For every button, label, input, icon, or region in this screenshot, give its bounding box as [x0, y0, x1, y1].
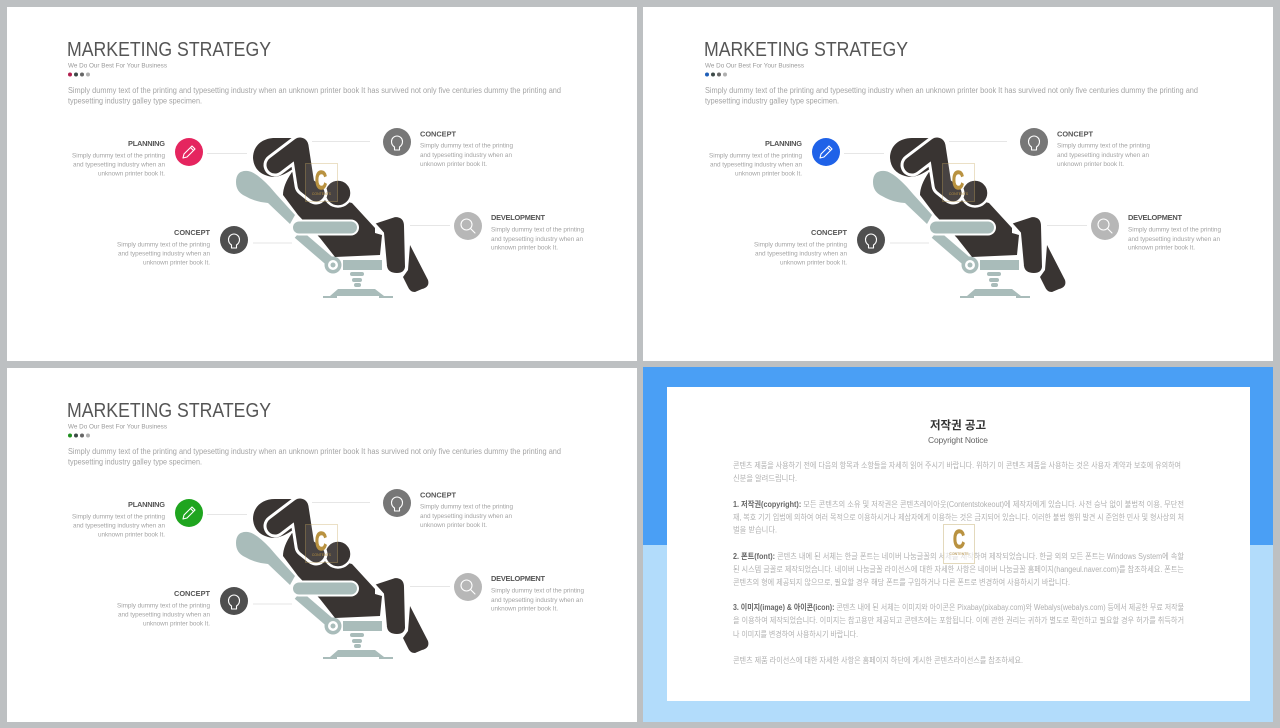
text: section 3 image and icon — [733, 602, 1184, 639]
watermark logo: C — [953, 524, 965, 554]
callout: concept top: unknown printer book It. — [420, 522, 487, 529]
figure: reclining person in chair — [873, 138, 1065, 298]
title: MARKETING STRATEGY — [704, 38, 908, 61]
watermark logo: CONTENTS — [312, 553, 332, 557]
callout: planning — [72, 499, 247, 538]
subtitle: We Do Our Best For Your Business — [68, 62, 167, 70]
callout: development: Simply dummy text of the printing — [491, 588, 584, 594]
callout: planning: Simply dummy text of the printing — [72, 514, 165, 520]
callout: concept top: unknown printer book It. — [1057, 161, 1124, 168]
callout: concept top: and typesetting industry when an — [420, 152, 512, 159]
text: closing note: 콘텐츠 제품 라이선스에 대한 자세한 사항은 홈페이지 하단에 게시한 콘텐츠라이선스를 참조하세요. — [733, 655, 1023, 665]
pagination dots — [68, 72, 90, 76]
callout: planning: PLANNING — [128, 500, 165, 509]
text: section 2 font: 된 시스템 글꼴로 제작되었습니다. 네이버 나눔글꼴 라이선스에 대한 자세한 사항은 네이버 나눔글꼴 홈페이지(hangeul.naver.com)를 참조하세요. 폰트는 — [733, 564, 1184, 574]
callout: concept left: unknown printer book It. — [780, 260, 847, 266]
callout: concept left: CONCEPT — [174, 589, 210, 598]
callout: development — [410, 573, 584, 612]
heading: copyright notice: Copyright Notice — [928, 435, 988, 445]
callout: development — [410, 212, 584, 252]
watermark logo: CONTENTS — [949, 552, 969, 556]
text: section 3 image and icon: 나 이미지를 변경하여 사용하시기 바랍니다. — [733, 629, 858, 639]
callout: planning: and typesetting industry when an — [73, 162, 165, 168]
intro paragraph: typesetting industry galley type specimen. — [68, 458, 202, 466]
callout: concept top: unknown printer book It. — [420, 161, 487, 168]
pagination dots — [68, 434, 90, 438]
callout: development: Simply dummy text of the printing — [1128, 226, 1221, 234]
callout: development: Simply dummy text of the printing — [491, 226, 584, 234]
callout: concept left — [117, 226, 292, 266]
callout: planning: Simply dummy text of the printing — [709, 152, 802, 160]
text: introduction: 콘텐츠 제품을 사용하기 전에 다음의 항목과 소항들을 자세히 읽어 주시기 바랍니다. 위하기 이 콘텐츠 제품을 사용하는 것은 사용자 계약과 보호에 유의하여 — [733, 460, 1181, 470]
watermark logo: CONTENTS — [312, 192, 332, 196]
watermark logo: C — [315, 526, 327, 556]
callout: planning: unknown printer book It. — [98, 170, 165, 178]
callout: planning: and typesetting industry when an — [710, 162, 802, 168]
callout: development: and typesetting industry when an — [1128, 236, 1220, 243]
text: section 1 copyright: 벌을 받습니다. — [733, 524, 777, 534]
callout: development: DEVELOPMENT — [491, 213, 545, 222]
callout: planning: and typesetting industry when an — [73, 522, 165, 530]
callout: development: DEVELOPMENT — [491, 574, 545, 583]
callout: development: and typesetting industry when an — [491, 597, 583, 604]
panel: marketing strategy slide, green — [7, 368, 637, 722]
text: section 3 image and icon: 을 이용하여 제작되었습니다. 이미지는 참고용만 제공되고 콘텐츠에는 포함됩니다. 이에 관한 권리는 귀하가 별도로 확인하고 필요할 경우 허가를 취득하거 — [733, 615, 1184, 625]
callout: concept top: CONCEPT — [1057, 130, 1093, 138]
callout: concept left: Simply dummy text of the printing — [117, 602, 210, 610]
title: MARKETING STRATEGY — [67, 399, 271, 422]
callout: concept top — [312, 128, 513, 168]
panel: marketing strategy slide, blue — [643, 7, 1273, 361]
callout: concept top: CONCEPT — [420, 490, 456, 500]
intro paragraph: typesetting industry galley type specimen. — [68, 96, 202, 106]
watermark logo: C — [315, 165, 327, 195]
callout: planning: unknown printer book It. — [735, 170, 802, 178]
watermark logo — [306, 524, 338, 562]
callout: concept left: and typesetting industry when an — [755, 250, 847, 258]
callout: concept left — [117, 587, 292, 628]
callout: concept left: Simply dummy text of the printing — [117, 242, 210, 248]
subtitle: We Do Our Best For Your Business — [68, 424, 167, 430]
text: section 1 copyright: 재, 복호 기기 입법에 의하여 여러 목적으로 이용하시거나 제삼자에게 이용하는 것은 금지되어 있습니다. 이러한 불법 행위 발견 시 준엄한 민사 및 형사상의 처 — [733, 512, 1184, 522]
text: section 1 copyright: 1. 저작권(copyright): 모든 콘텐츠의 소유 및 저작권은 콘텐츠레이아웃(Contentstokeout)에 제작자에게 있습니다. 사전 승낙 없이 불법적 이용, 무단전 — [733, 499, 1184, 509]
callout: concept left: and typesetting industry when an — [118, 250, 210, 258]
callout: concept top: and typesetting industry when an — [1057, 152, 1149, 159]
heading: copyright notice: 저작권 공고 — [930, 418, 986, 432]
watermark logo: C — [952, 165, 964, 195]
callout: concept top: and typesetting industry when an — [420, 513, 512, 520]
intro paragraph: typesetting industry galley type specimen. — [705, 96, 839, 106]
figure: reclining person in chair — [236, 499, 428, 659]
callout: development: and typesetting industry when an — [491, 236, 583, 243]
callout: concept top: Simply dummy text of the printing — [1057, 142, 1150, 150]
callout: concept top — [949, 128, 1150, 168]
text: introduction — [733, 460, 1181, 483]
watermark logo — [942, 164, 974, 202]
callout: planning: Simply dummy text of the printing — [72, 152, 165, 160]
callout: planning: unknown printer book It. — [98, 532, 165, 538]
callout: concept left — [754, 226, 929, 266]
callout: concept left: CONCEPT — [811, 228, 847, 237]
text: section 2 font: 2. 폰트(font): 콘텐츠 내에 된 서체는 한글 폰트는 네이버 나눔글꼴의 서체를 제작하여 제작되었습니다. 한글 외의 모든 폰트는 Windows System에 속할 — [733, 551, 1185, 561]
text: section 2 font: 콘텐츠의 형에 제공되지 않으므로, 필요할 경우 해당 폰트를 구입하거나 다른 폰트로 변경하여 사용하시기 바랍니다. — [733, 577, 1070, 587]
pagination dots — [705, 72, 727, 76]
watermark logo — [944, 524, 974, 564]
callout: concept top: CONCEPT — [420, 130, 456, 138]
text: introduction: 신분을 알려드립니다. — [733, 473, 797, 483]
watermark logo — [306, 164, 338, 202]
watermark logo: CONTENTS — [949, 192, 969, 196]
intro paragraph: Simply dummy text of the printing and typesetting industry when an unknown printer book It has survived not only five centuries dummy the printing and — [705, 86, 1198, 95]
callout: development: unknown printer book It. — [491, 606, 558, 612]
panel: marketing strategy slide, crimson — [7, 7, 637, 361]
intro paragraph — [68, 86, 561, 106]
callout: planning: PLANNING — [765, 139, 802, 148]
callout: concept left: unknown printer book It. — [143, 620, 210, 628]
intro paragraph — [68, 447, 561, 466]
subtitle: We Do Our Best For Your Business — [705, 62, 804, 70]
title: MARKETING STRATEGY — [67, 38, 271, 61]
callout: development: unknown printer book It. — [491, 244, 558, 252]
callout: concept left: CONCEPT — [174, 228, 210, 237]
callout: concept left: Simply dummy text of the printing — [754, 242, 847, 248]
callout: concept top — [312, 489, 513, 529]
text: section 2 font — [733, 551, 1185, 587]
callout: planning — [709, 138, 884, 178]
text: section 3 image and icon: 3. 이미지(image) & 아이콘(icon): 콘텐츠 내에 된 서체는 이미지와 아이콘은 Pixabay(pixabay.com)와 Webalys(webalys.com) 등에서 제공한 무료 저작물 — [733, 602, 1184, 612]
callout: concept left: and typesetting industry when an — [118, 612, 210, 618]
callout: concept top: Simply dummy text of the printing — [420, 142, 513, 150]
intro paragraph — [705, 86, 1198, 106]
callout: development: DEVELOPMENT — [1128, 213, 1182, 222]
callout: concept top: Simply dummy text of the printing — [420, 504, 513, 510]
panel: copyright notice slide — [643, 367, 1273, 722]
intro paragraph: Simply dummy text of the printing and typesetting industry when an unknown printer book It has survived not only five centuries dummy the printing and — [68, 447, 561, 456]
callout: planning — [72, 138, 247, 178]
text: section 1 copyright — [733, 499, 1184, 534]
callout: concept left: unknown printer book It. — [143, 260, 210, 266]
figure: reclining person in chair — [236, 138, 428, 298]
callout: planning: PLANNING — [128, 139, 165, 148]
heading: copyright notice — [928, 418, 988, 445]
callout: development — [1047, 212, 1221, 252]
intro paragraph: Simply dummy text of the printing and typesetting industry when an unknown printer book It has survived not only five centuries dummy the printing and — [68, 86, 561, 95]
callout: development: unknown printer book It. — [1128, 244, 1195, 252]
